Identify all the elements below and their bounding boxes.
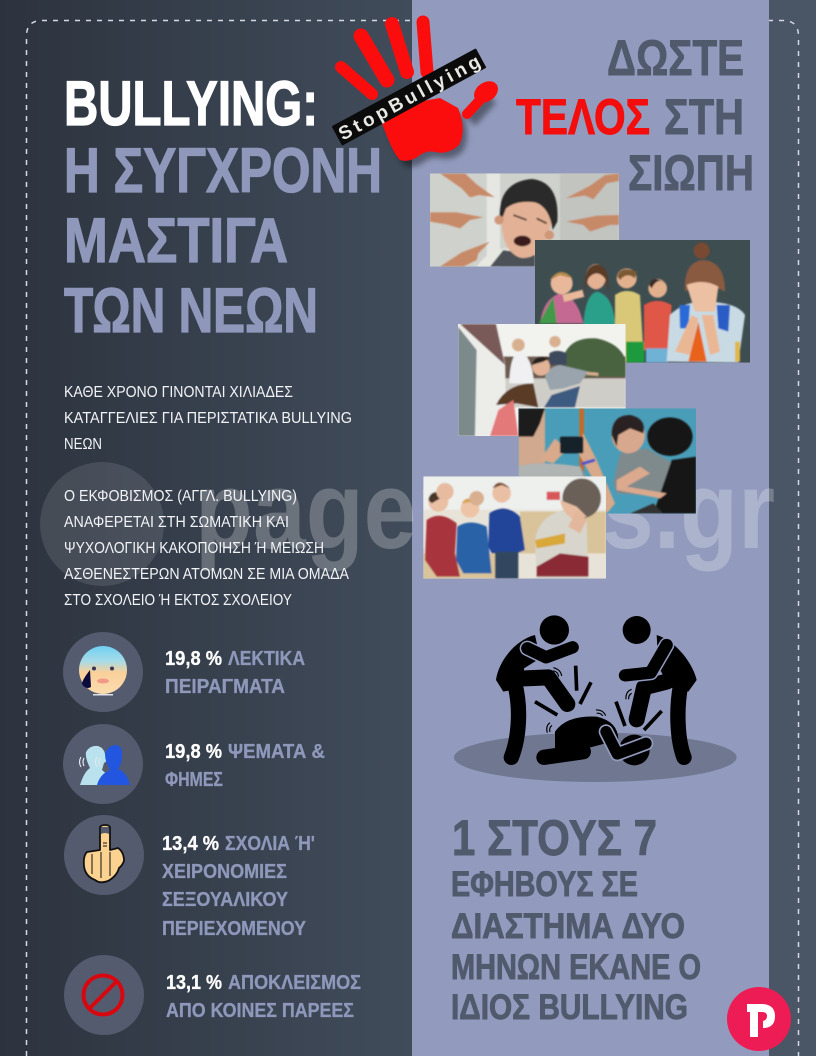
heading: ΔΩΣΤΕ ΤΕΛΟΣ ΣΤΗ ΣΙΩΠΗ: [516, 30, 754, 201]
photo: crying boy with pointing hands: [430, 173, 619, 267]
text block: definition: ΣΤΟ ΣΧΟΛΕΙΟ Ή ΕΚΤΟΣ ΣΧΟΛΕΙΟΥ: [64, 592, 292, 609]
heading: ΔΩΣΤΕ ΤΕΛΟΣ ΣΤΗ ΣΙΩΠΗ: ΔΩΣΤΕ: [607, 30, 744, 86]
watermark: pagenews.gr: [40, 449, 775, 586]
banner: stop bullying: StopBullying: [335, 52, 484, 145]
callout: one in seven teens: ΜΗΝΩΝ ΕΚΑΝΕ Ο: [451, 948, 701, 987]
callout: one in seven teens: ΔΙΑΣΤΗΜΑ ΔΥΟ: [451, 907, 685, 946]
text block: definition: ΨΥΧΟΛΟΓΙΚΗ ΚΑΚΟΠΟΙΗΣΗ Ή ΜΕΙΩΣΗ: [64, 540, 324, 557]
icon: crying face: [63, 632, 143, 712]
callout: one in seven teens: 1 ΣΤΟΥΣ 7: [452, 810, 657, 866]
stat: exclusion from groups: 13,1 %: [166, 972, 222, 994]
text block: definition: [64, 488, 350, 609]
text block: intro: ΚΑΘΕ ΧΡΟΝΟ ΓΙΝΟΝΤΑΙ ΧΙΛΙΑΔΕΣ: [64, 384, 293, 401]
stat: exclusion from groups: [166, 972, 361, 1022]
icon: middle finger hand: [64, 815, 144, 895]
panel: lavender column: [412, 0, 769, 1056]
stat: lies and rumours: ΦΗΜΕΣ: [165, 769, 223, 791]
stat: lies and rumours: [165, 741, 325, 791]
heading: ΔΩΣΤΕ ΤΕΛΟΣ ΣΤΗ ΣΙΩΠΗ: ΤΕΛΟΣ: [516, 89, 650, 145]
title: Η ΣΥΓΧΡΟΝΗ: [64, 136, 382, 206]
title: ΤΩΝ ΝΕΩΝ: [64, 276, 318, 346]
photo: boy filming a fight in a school corridor: [518, 408, 696, 514]
icon: prohibition sign: [64, 955, 144, 1035]
stat: lies and rumours: 19,8 %: [165, 741, 222, 763]
icon: two figures kicking a person on the ground: [454, 615, 737, 782]
stat: exclusion from groups: ΑΠΟΚΛΕΙΣΜΟΣ: [228, 972, 361, 994]
callout: one in seven teens: [451, 810, 701, 1027]
text block: definition: Ο ΕΚΦΟΒΙΣΜΟΣ (ΑΓΓΛ. BULLYING): [64, 488, 297, 505]
text block: definition: ΑΣΘΕΝΕΣΤΕΡΩΝ ΑΤΟΜΩΝ ΣΕ ΜΙΑ ΟΜΑΔΑ: [64, 566, 350, 583]
background: right strip: [769, 0, 816, 1056]
stat: exclusion from groups: ΑΠΟ ΚΟΙΝΕΣ ΠΑΡΕΕΣ: [166, 1000, 354, 1022]
shadow ellipse: [454, 733, 737, 782]
figure: right attacker: [623, 616, 697, 757]
stat: lies and rumours: ΨΕΜΑΤΑ &: [228, 741, 325, 763]
text block: intro: ΝΕΩΝ: [64, 436, 102, 453]
stat: verbal teasing: ΛΕΚΤΙΚΑ: [228, 648, 305, 670]
callout: one in seven teens: ΙΔΙΟΣ BULLYING: [451, 988, 688, 1027]
stat: sexual comments or gestures: [162, 833, 315, 940]
callout: one in seven teens: ΕΦΗΒΟΥΣ ΣΕ: [451, 865, 638, 904]
photo: boy taunting a girl by a wall: [458, 324, 626, 436]
photo: classmates laughing at a boy in a classroom: [423, 476, 606, 579]
heading: ΔΩΣΤΕ ΤΕΛΟΣ ΣΤΗ ΣΙΩΠΗ: ΣΙΩΠΗ: [628, 145, 754, 201]
text block: definition: ΑΝΑΦΕΡΕΤΑΙ ΣΤΗ ΣΩΜΑΤΙΚΗ ΚΑΙ: [64, 514, 289, 531]
icon: red hand with stop bullying banner: [332, 22, 502, 167]
title: BULLYING:: [64, 69, 318, 139]
photo: girl covering her face, classmates pointing: [535, 240, 750, 363]
stat: verbal teasing: ΠΕΙΡΑΓΜΑΤΑ: [165, 676, 285, 698]
icon: red P logo: [727, 987, 791, 1051]
impact lines: [535, 666, 662, 730]
figure: left attacker: [496, 615, 573, 757]
text block: intro: ΚΑΤΑΓΓΕΛΙΕΣ ΓΙΑ ΠΕΡΙΣΤΑΤΙΚΑ BULLYING: [64, 410, 352, 427]
stat: sexual comments or gestures: ΣΕΞΟΥΑΛΙΚΟΥ: [162, 889, 289, 911]
text block: intro: [64, 384, 352, 453]
title: ΜΑΣΤΙΓΑ: [64, 206, 288, 276]
icon: whispering heads: [63, 724, 143, 804]
stat: sexual comments or gestures: ΧΕΙΡΟΝΟΜΙΕΣ: [162, 861, 287, 883]
heading: ΔΩΣΤΕ ΤΕΛΟΣ ΣΤΗ ΣΙΩΠΗ: ΣΤΗ: [664, 89, 744, 145]
title: [64, 69, 382, 346]
stat: verbal teasing: [165, 648, 305, 698]
stat: verbal teasing: 19,8 %: [165, 648, 222, 670]
background: dark left panel: [0, 0, 412, 1056]
figure: victim on the ground: [544, 717, 650, 765]
stat: sexual comments or gestures: 13,4 %: [162, 833, 219, 855]
stat: sexual comments or gestures: ΣΧΟΛΙΑ Ή': [225, 833, 315, 855]
stat: sexual comments or gestures: ΠΕΡΙΕΧΟΜΕΝΟΥ: [162, 918, 307, 940]
